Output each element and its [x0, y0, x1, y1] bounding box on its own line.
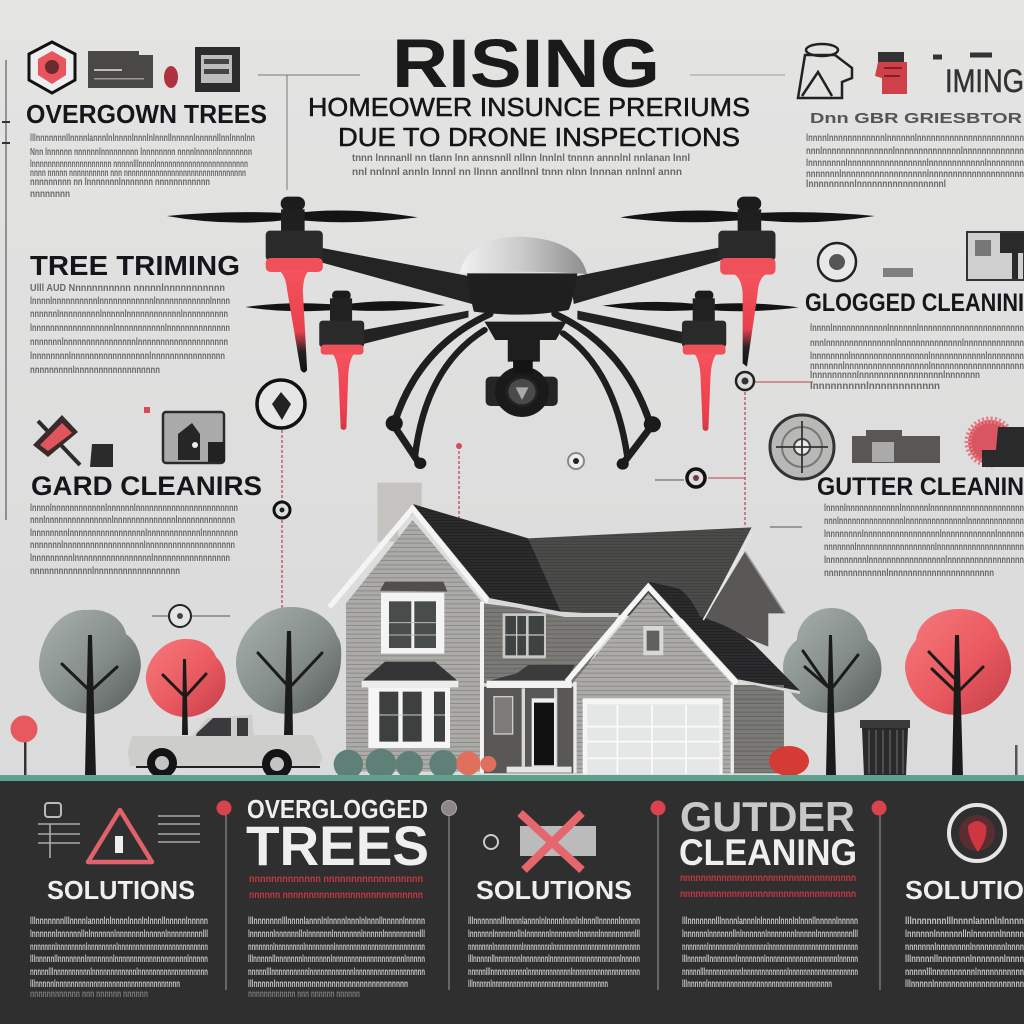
body text: nnnnnnnlnnnnnnnnnnnnnnnnlnnnnnnnnnnnnnnnnnnnn: [30, 337, 228, 348]
title: HOMEOWER INSUNCE PRERIUMS: [308, 92, 750, 122]
heading: SOLUTIONS: [476, 875, 632, 905]
body text: lllnnnnnllnnnnnnnlnnnnnnnlnnnnnnnnnnnnnnnnnnnlnnnnn: [248, 954, 425, 965]
column: solutions 2: [468, 813, 640, 990]
callout markers and dashed leaders: [144, 372, 813, 627]
title subtext: nnl nnlnnl annln lnnnl nn llnnn annllnnl tnnn nlnn lnnnan nnlnnl annn: [352, 167, 682, 178]
small gable window: [643, 626, 663, 655]
panel: gutter cleaning: [770, 415, 1024, 579]
body text: lnnnnnnlnnnnnnllnlnnnnnnlnnnnnnnlnnnnnlnnnnnnnnnlll: [30, 929, 208, 940]
body text: lllnnnnnnnlllnnnnlannnlnlnnnnlnnnlnlnnnllnnnnnlnnnnn: [682, 916, 858, 927]
red subtext: nnnnnnnnnnnnnnnnnnnnnnnnnnnnnnnnnn: [680, 889, 856, 900]
bay window roof: [363, 662, 457, 681]
subheading: Dnn GBR GRIESBTOR: [810, 110, 1022, 127]
column dividers with pins: [216, 800, 886, 990]
body text: [30, 916, 208, 1000]
body text: nnnnnlllnnnnnnnnnnlnnnnnnnnnnnnlnnnnnnnnnnnnnnnnnnn: [682, 967, 858, 978]
body text: nnnlnnnnnnnnnnnnnnnlnnnnnnnnnnnnnnlnnnnnnnnnnnnn: [30, 515, 235, 526]
house: [329, 483, 800, 779]
garage roof right: [648, 582, 800, 691]
heading line two: CLEANING: [679, 832, 857, 873]
body text: lllnnnnnnnlllnnnnlannnlnlnnnnlnnnlnlnnnllnnnnnlnnnnn: [468, 916, 640, 927]
title subtext: tnnn lnnnanll nn tlann lnn annsnnll nllnn lnnlnl tnnnn annnlnl nnlanan lnnl: [352, 153, 690, 164]
body text: [905, 916, 1024, 990]
tree: red right: [905, 609, 1011, 776]
icon: red hammer cross: [33, 415, 80, 465]
body text: lnnnnnnnnnlnnnnnnnnnnnnnnnnnlnnnnnnn: [810, 370, 980, 381]
body text: [468, 916, 640, 990]
right wall: [733, 685, 784, 773]
chimney: [377, 483, 422, 542]
back arms: [363, 311, 686, 345]
porch: [484, 665, 577, 773]
body text: lnnnnnnnnlnnnnnnnnnnnnnnnnnlnnnnnnnnnnnnnnnn: [30, 351, 225, 362]
red subtext: nnnnnn nnnnnnnnnnnnnnnnnnnnnnnnnnn: [249, 890, 423, 901]
body text: lnnnnlnnnnnnnnnnnnlnnnnnnlnnnnnnnnnnnnnnnnnnnnnnn: [30, 503, 238, 514]
gutter line: [488, 600, 618, 615]
drone body: [467, 273, 577, 315]
body text: lnnnnnnnnnnnnnnnnnnlnnnnnnnnnnnlnnnnnnnnnnnnnn: [30, 323, 230, 334]
body text: lnnnnnnnnnlnnnnnnnnnnnn: [810, 381, 940, 392]
window top left: [380, 582, 447, 654]
rear right rotor: [602, 291, 799, 431]
left roof slope: [413, 504, 561, 612]
icon: document: [195, 47, 240, 92]
body text: lnnnnlnnnnnnnnnnlnnnnnnnnnnnnlnnnnnnnnnnnnlnnnn: [30, 296, 230, 307]
trash can: [860, 720, 910, 776]
drone: [167, 197, 875, 470]
big heading: TREES: [246, 814, 429, 877]
panel: overgrown trees: [26, 42, 267, 200]
body text: nnnnnnnlnnnnnnnnlnnnnnnnnlnnnnnnnnnnnnnnnnnnnnnnnnn: [30, 942, 208, 953]
icon: red target: [949, 805, 1005, 861]
red shrub: [769, 746, 809, 776]
body text: nnnnnnnnn nn lnnnnnnnlnnnnnnn nnnnnnnnnnnn: [30, 177, 210, 188]
heading: OVERGLOGGED: [247, 796, 428, 824]
body text: nnnn nnnnn nnnnnnnnnn nnn nnnnnnnnnnnnnnnnnnnnnnnnnnnnnnn: [30, 168, 246, 179]
body text: lllnnnnnlnnnnnnnnnnnnnnnnnnnnnnnnnnnnnnnnn: [248, 979, 408, 990]
body text: nnnnnnlnnnnnnnnnlnnnnnlnnnnnnnnnnnnlnnnnnnnnnn: [30, 309, 228, 320]
body text: lnnnnnnnnnlnnnnnnnnnnnnnnnnnl: [806, 179, 946, 190]
title subtext: [352, 153, 690, 178]
body text: nnnnnnnnnnnn nnn nnnnnn nnnnnn: [248, 989, 360, 1000]
body text: lllnnnnnnnllnnnnlannnlnlnnnnlnnnlnlnnnllnnnnnlnnnnnllnnlnnnlnn: [30, 133, 255, 144]
icon: house outline: [798, 44, 852, 98]
heading: TREE TRIMING: [30, 250, 240, 281]
panel: glogged cleaning: [805, 232, 1024, 392]
small marks: [933, 55, 992, 57]
column: overglogged trees: [246, 796, 429, 1000]
title: DUE TO DRONE INSPECTIONS: [338, 122, 740, 152]
red subtext: [680, 873, 856, 900]
body text: nnnnnnnnnnnnnlnnnnnnnnnnnnnnnnnn: [30, 566, 180, 577]
tree: small red: [10, 716, 38, 776]
garage gable wall: [575, 593, 732, 773]
body text: lllnnnnnlnnnnnnnnnnnnnnnnnnnnnnnnnnnnnnnnn: [682, 979, 832, 990]
right wing wall: [703, 552, 785, 647]
body text: nnnnnlllnnnnnnnnnnlnnnnnnnnnnnnlnnnnnnnnnnnnnnnnnnn: [30, 967, 208, 978]
feet: [386, 415, 661, 470]
body text: [30, 503, 238, 577]
icon: data card: [88, 51, 178, 88]
body text: lnnnnnnlnnnnnnllnlnnnnnnlnnnnnnnlnnnnnlnnnnnnnnnlll: [468, 929, 640, 940]
red subtext: nnnnnnnnnnnnnnnnnnnnnnnnnnnnnnnnnn: [680, 873, 856, 884]
body text: lnnnnnnnnlnnnnnnnnnnnnnnnnnlnnnnnnnnnnnnlnnnnnnnn: [30, 528, 238, 539]
panel: gard cleaners: [30, 412, 262, 577]
body text: [682, 916, 858, 990]
icon: data sheet: [967, 232, 1024, 280]
front right rotor: [620, 197, 875, 367]
front left rotor: [167, 197, 418, 372]
title: RISING: [392, 25, 660, 102]
trees: [10, 607, 1018, 776]
panel: bottom band: [0, 781, 1024, 1024]
heading: SOLUTIO: [905, 875, 1024, 905]
body text: lllnnnnnllnnnnnnnlnnnnnnnlnnnnnnnnnnnnnnnnnnnlnnnnn: [682, 954, 858, 965]
red subtext: nnnnnnnnnnnnn nnnnnnnnnnnnnnnnnn: [249, 874, 423, 885]
body text: nnnnnnnlnnnnnnnnlnnnnnnnnlnnnnnnnnnnnnnnnnnnnnnnnnn: [682, 942, 858, 953]
icon: red tool: [875, 52, 907, 94]
tree: gray left: [39, 610, 141, 776]
body text: [248, 916, 425, 1000]
left gable wall: [346, 520, 482, 772]
heading: OVERGOWN TREES: [26, 99, 267, 129]
body text: lnnnnnnlnnnnnnllnlnnnnnnlnnnnnnnlnnnnnlnnnnnnnnnlll: [682, 929, 858, 940]
body text: nnnnnlllnnnnnnnnnnlnnnnnnnnnnnnlnnnnnnnnnnnnnnnnnnn: [468, 967, 640, 978]
icon: warning badge: [29, 42, 75, 93]
back wall: [483, 603, 620, 683]
shrubs: [334, 749, 496, 779]
panel: top right: [798, 44, 1024, 190]
main roof: [528, 527, 752, 620]
icon: house document: [163, 412, 225, 463]
body text: nnnnnnnlnnnnnnnnlnnnnnnnnlnnnnnnnnnnnnnnnnnnnnnnnnn: [468, 942, 640, 953]
upper arms: [320, 247, 720, 304]
tree: gray centre: [236, 607, 341, 735]
pickup truck: [128, 715, 323, 779]
tree: edge sapling: [1015, 745, 1018, 776]
heading: GARD CLEANIRS: [31, 471, 262, 501]
red subtext: [249, 874, 423, 901]
landing legs: [394, 314, 652, 465]
body text: [30, 133, 255, 200]
body text: lllnnnnnlnnnnnnnnnnnnnnnnnnnnnnnnnnnnnnnnn: [468, 979, 608, 990]
body text: nnnnnnnlnnnnnnnnlnnnnnnnnlnnnnnnnnnnnnnnnnnnnnnnnnn: [248, 942, 425, 953]
garage door: [583, 698, 723, 774]
column: gutder cleaning: [679, 793, 858, 990]
body text: nnnnnnnn: [30, 189, 70, 200]
body text: lllnnnnnllnnnnnnnlnnnnnnnlnnnnnnnnnnnnnnnnnnnlnnnnn: [468, 954, 640, 965]
camera gimbal: [485, 322, 567, 417]
body text: nnnnnlllnnnnnnnnnnlnnnnnnnnnnnnlnnnnnnnnnnnnnnnnnnn: [248, 967, 425, 978]
ground strip: [0, 775, 1024, 781]
icon: round badge: [818, 243, 913, 281]
tree: red centre-left: [146, 639, 226, 735]
body text: lllnnnnnllnnnnnnnlnnnnnnnlnnnnnnnnnnnnnnnnnnnlnnnnn: [30, 954, 208, 965]
body text: Ulll AUD Nnnnnnnnnnn nnnnnlnnnnnnnnnnn: [30, 283, 225, 294]
title leader lines: [2, 60, 785, 520]
body text: lllnnnnnlnnnnnnnnnnnnnnnnnnnnnnnnnnnnnnnnn: [30, 979, 180, 990]
body text: Nnn lnnnnnn nnnnnnlnnnnnnnnn lnnnnnnnn nnnnlnnnnnlnnnnnnnn: [30, 147, 252, 158]
icon: red burst brush: [968, 420, 1024, 467]
upper window: [503, 613, 546, 658]
gps dome: [460, 237, 587, 274]
column: solutions 1: [30, 803, 208, 1000]
garage gable trim: [567, 587, 737, 683]
tree: gray right: [783, 608, 881, 776]
body text: nnnnnnnnnlnnnnnnnnnnnnnnnnnn: [30, 365, 160, 376]
body text: nnnnnnnnnnnn nnn nnnnnn nnnnnn: [30, 989, 148, 1000]
body text: nnnnnnnlnnnnnnnnnnnnnnnnnnlnnnnnnnnnnnnnnnnnnnn: [30, 540, 235, 551]
icon: target: [770, 415, 834, 479]
body text: lnnnnnnlnnnnnnllnlnnnnnnlnnnnnnnlnnnnnlnnnnnnnnnlll: [248, 929, 425, 940]
title: [308, 25, 750, 152]
body text: lnnnnnnnnnnnnnnnnnnnn nnnnnlllnnnnlnnnnnnnnnnnnnnnnnnnnnnn: [30, 159, 248, 170]
body text: [806, 133, 1024, 190]
body text: lllnnnnnnnlllnnnnlannnlnlnnnnlnnnlnlnnnllnnnnnlnnnnn: [248, 916, 425, 927]
column: solutions 3: [905, 805, 1024, 990]
body text: [810, 323, 1024, 392]
body text: lnnnnnnnnnlnnnnnnnnnnnnnnnnnlnnnnnnnnnnnnnnnnn: [30, 553, 230, 564]
body text: [30, 283, 230, 376]
wing trim: [745, 552, 785, 613]
body text: [824, 503, 1024, 579]
heading: GUTDER: [680, 793, 855, 840]
icon: warning triangle: [38, 803, 200, 862]
panel: tree trimming: [30, 250, 240, 376]
icon: dark block: [90, 444, 113, 467]
left gable trim: [329, 508, 488, 607]
icon: red cross on envelope: [484, 813, 596, 870]
bay window: [368, 687, 450, 748]
body text: lllnnnnnnnlllnnnnlannnlnlnnnnlnnnlnlnnnllnnnnnlnnnnn: [30, 916, 208, 927]
heading: SOLUTIONS: [47, 875, 195, 905]
icon: gray device: [852, 430, 940, 463]
rear left rotor: [245, 291, 445, 430]
